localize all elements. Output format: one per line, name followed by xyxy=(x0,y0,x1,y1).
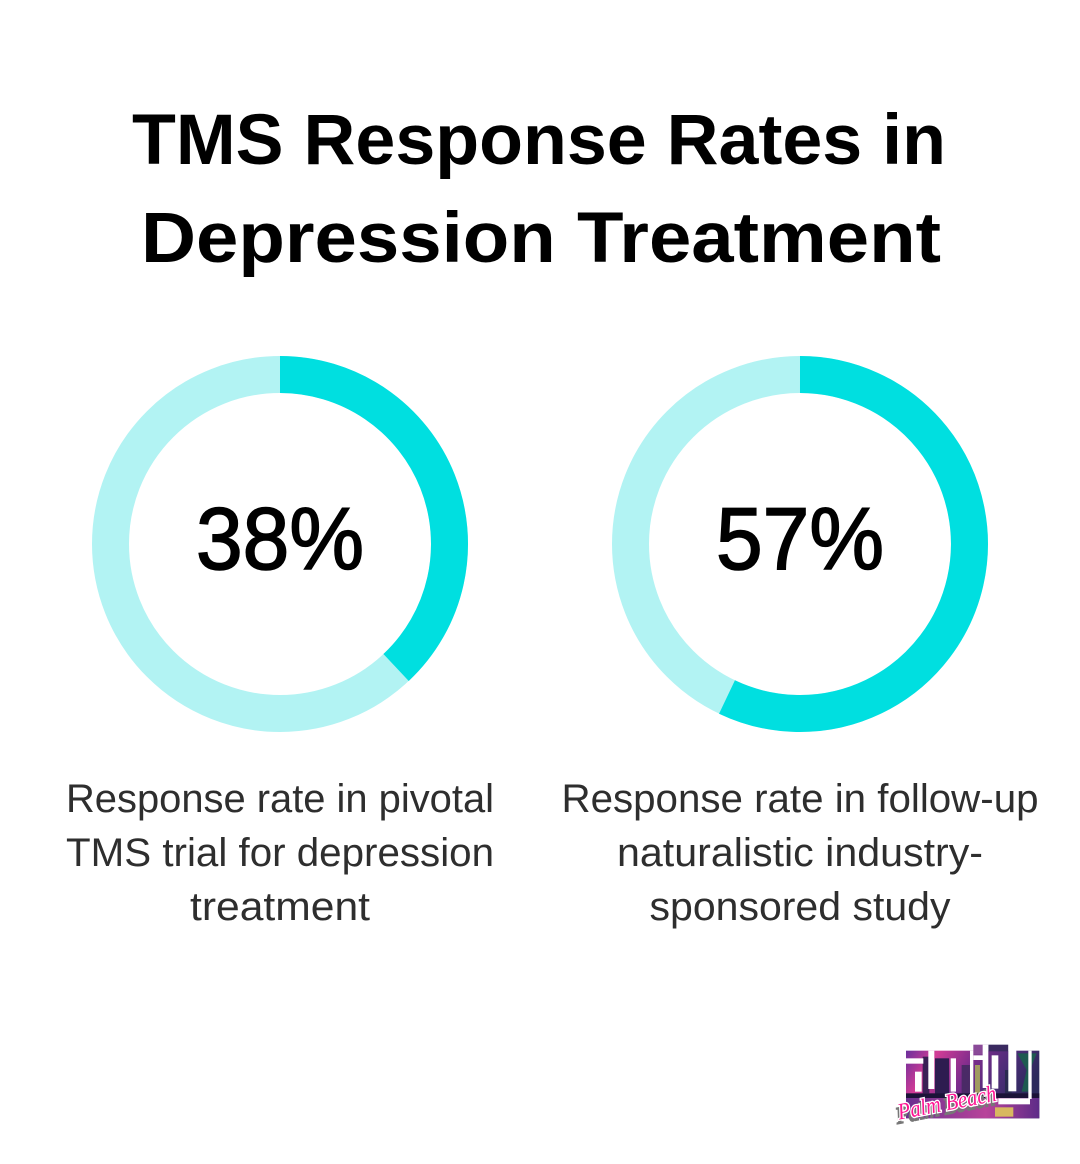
logo: Amity Palm Beach xyxy=(892,1045,1039,1130)
panel: naturalistic study response rate xyxy=(562,374,1038,929)
title: TMS Response Rates in xyxy=(132,101,946,180)
caption: pivotal trial: Response rate in pivotal xyxy=(66,777,494,821)
caption: naturalistic study: Response rate in follow-up xyxy=(562,777,1038,821)
panel: pivotal trial response rate xyxy=(66,374,494,929)
title: Depression Treatment xyxy=(141,199,941,278)
caption: pivotal trial xyxy=(66,777,494,929)
caption: pivotal trial: TMS trial for depression xyxy=(66,831,494,875)
donut chart: 38% xyxy=(110,374,450,714)
title xyxy=(132,101,946,278)
logo script: Palm Beach: Palm Beach xyxy=(893,1085,997,1130)
donut chart: 57% xyxy=(630,374,970,714)
caption: naturalistic study: sponsored study xyxy=(650,885,950,929)
logo script: Palm Beach: Palm Beach xyxy=(895,1081,999,1126)
caption: naturalistic study: naturalistic industry- xyxy=(617,831,983,875)
caption: naturalistic study xyxy=(562,777,1038,929)
value: 57%: 57% xyxy=(716,489,884,588)
value: 38%: 38% xyxy=(196,489,364,588)
logo wordmark: amity xyxy=(973,1089,975,1090)
logo city image block xyxy=(906,1045,1039,1118)
caption: pivotal trial: treatment xyxy=(190,885,370,929)
logo letter gaps xyxy=(906,1045,1032,1104)
